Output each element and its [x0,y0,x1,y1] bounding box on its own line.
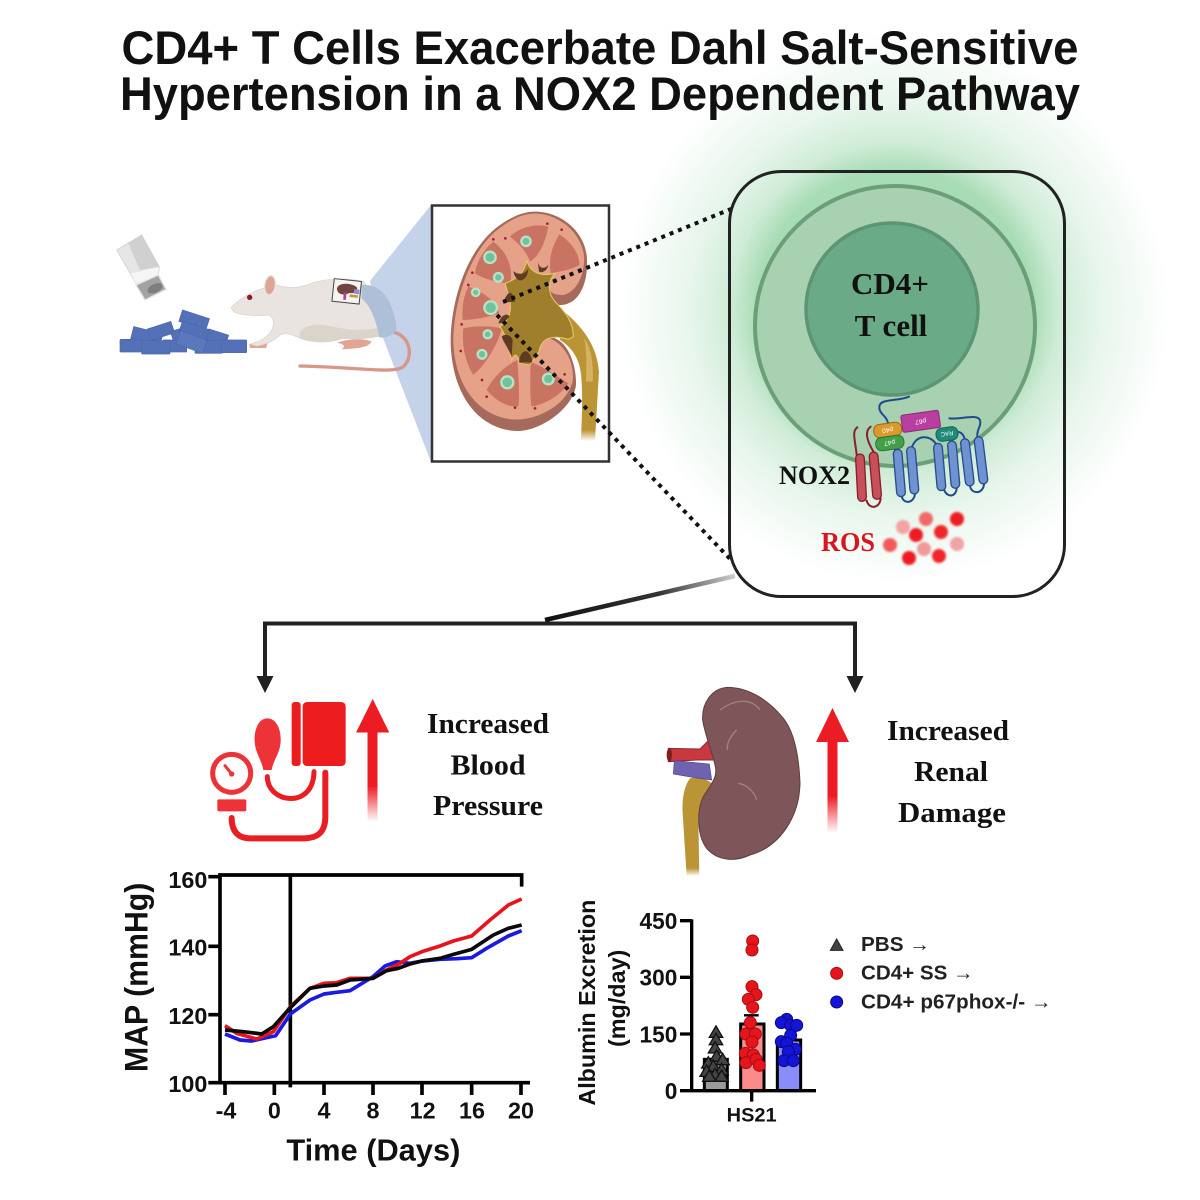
legend: CD4+ p67phox-/-: CD4+ p67phox-/- → [861,991,1052,1013]
rear foot [337,339,372,349]
branching arrow [256,624,864,693]
p67 subunit: p67 [914,417,927,425]
title: Hypertension in a NOX2 Dependent Pathway [120,67,1080,120]
label: CD4+ T cell: T cell [855,308,928,343]
legend: PBS: PBS → [861,934,930,956]
red up arrow: renal damage [816,708,849,833]
bars [704,1024,801,1091]
zoom cone from rat to kidney [370,205,431,462]
RAC subunit: RAC [939,429,953,437]
axes [208,875,530,1095]
panel: T cell [730,172,1064,596]
legend: PBS [830,934,930,956]
text: increased blood pressure: Increased [427,708,549,740]
tail [300,333,409,370]
immune cells in kidney [472,237,554,388]
CD4+ SS data points [739,935,765,1071]
label: CD4+ T cell [851,266,929,343]
legend: CD4+ SS: CD4+ SS → [861,962,974,984]
nucleus [806,223,978,395]
x tick labels: 0 [268,1097,281,1123]
red up arrow: blood pressure [356,699,389,822]
label: ROS: ROS [821,527,875,557]
y axis title: Albumin Excretion [574,900,600,1106]
text: increased renal damage: Renal [914,756,988,788]
kidney rim [451,212,587,431]
rat body [231,279,387,346]
icon: salt shaker [117,235,166,300]
axes [680,919,816,1102]
x label: HS21 [727,1106,777,1127]
x tick labels: 16 [459,1097,485,1123]
title: CD4+ T Cells Exacerbate Dahl Salt-Sensitive [122,21,1078,74]
y tick labels: 300 [640,965,677,991]
x tick labels: 20 [508,1097,534,1123]
PBS data points [700,1026,729,1081]
outer cell membrane [755,186,1035,466]
renal pelvis [500,260,573,365]
y tick labels: 120 [168,1003,207,1029]
legend [830,934,1052,1013]
icon: blue salt cubes [120,310,247,354]
dotted zoom lines to T cell panel [497,209,732,561]
x tick labels [216,1097,534,1123]
calyces [498,260,548,362]
x tick labels: 8 [367,1097,380,1123]
x tick labels: 12 [410,1097,436,1123]
connector from T cell to bracket [545,576,735,620]
mini kidney inset [332,279,361,304]
y tick labels: 140 [168,935,207,961]
blue cuff [362,285,396,338]
y tick labels: 0 [665,1078,677,1104]
rat eye [247,295,252,300]
y tick labels [640,908,677,1104]
label: NOX2: NOX2 [779,461,850,490]
y tick labels: 150 [640,1021,677,1047]
x tick labels: 4 [318,1097,331,1123]
x tick labels: -4 [216,1097,236,1123]
black series [225,925,522,1034]
ROS particles [883,512,964,565]
line chart: MAP over time [117,867,534,1168]
y axis title [574,900,630,1106]
CD4+ p67phox data points [775,1013,803,1067]
text: increased blood pressure: Pressure [433,790,543,822]
kidney cortex [453,214,584,420]
label: CD4+ T cell: CD4+ [851,266,929,301]
icon: blood pressure monitor [213,702,346,838]
text: increased renal damage: Damage [898,797,1006,829]
blue series [225,931,522,1041]
red series [225,899,522,1039]
y tick labels: 450 [640,908,677,934]
medullary pyramids [462,225,579,407]
p47 subunit: p47 [883,438,896,446]
panel: kidney cross-section box [432,206,609,462]
ureter [555,304,599,441]
y tick labels [168,867,207,1097]
front paw [249,341,268,348]
y axis title: (mg/day) [604,950,630,1047]
p40 subunit: p40 [881,425,894,434]
text: increased renal damage [887,715,1009,829]
title [120,21,1080,120]
NOX2 complex [854,397,988,507]
text: increased blood pressure: Blood [450,750,526,782]
y tick labels: 100 [168,1071,207,1097]
green glow behind T cell panel [620,33,1170,583]
bar chart: albumin excretion [574,900,816,1127]
icon: damaged kidney [667,687,800,876]
y axis title: MAP (mmHg) [117,883,154,1072]
text: increased blood pressure [427,708,549,822]
y tick labels: 160 [168,867,207,893]
panel: high salt diet and rat [117,235,409,370]
x axis title: Time (Days) [286,1135,460,1168]
kidney cross-section [451,212,599,441]
rat ear [263,275,277,296]
text: increased renal damage: Increased [887,715,1009,747]
